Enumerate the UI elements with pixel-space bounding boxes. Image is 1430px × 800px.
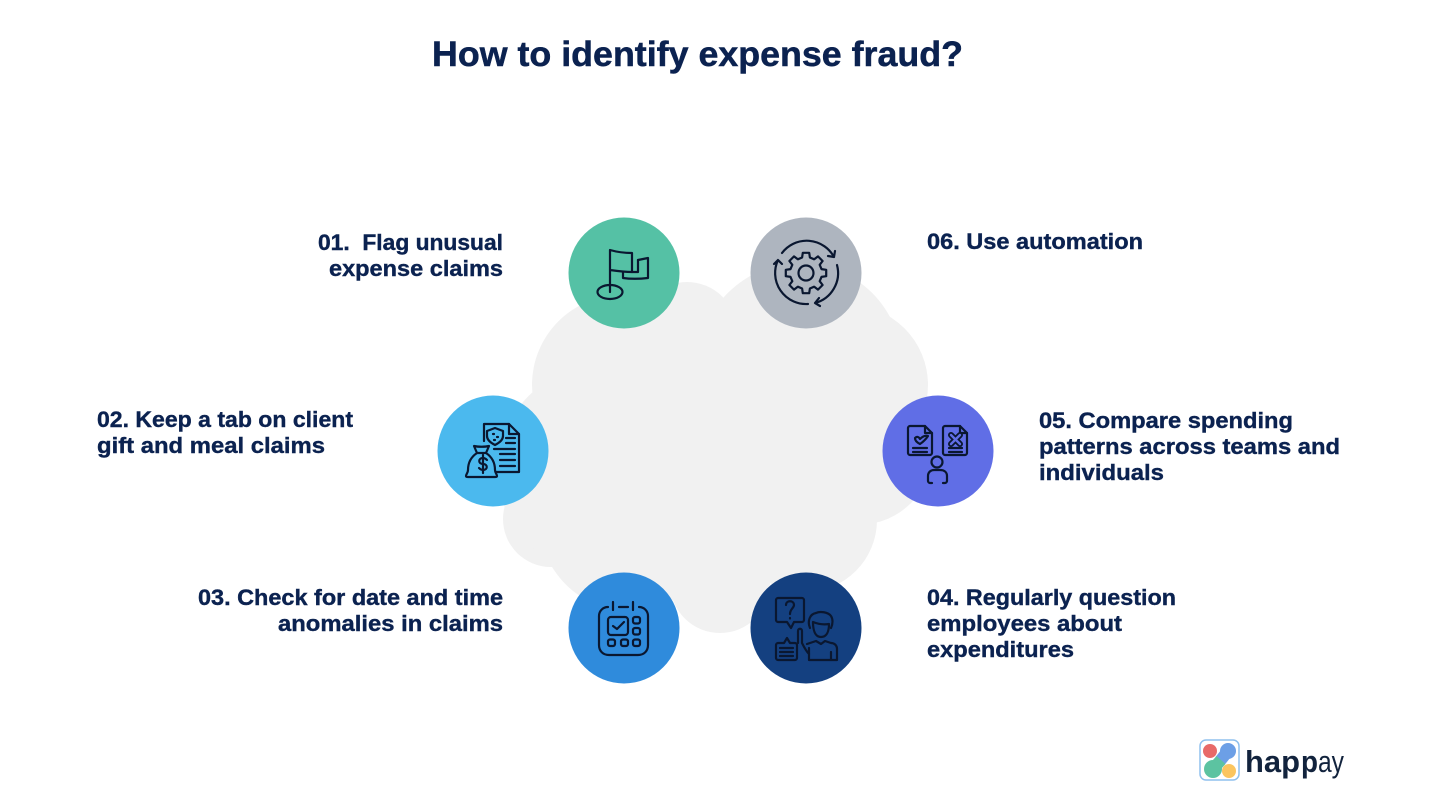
icon: money bag and document	[438, 396, 548, 506]
step 01 label: 01. Flag unusual	[318, 230, 503, 255]
step 06 label: 06. Use automation	[927, 229, 1143, 254]
icon: two documents and person	[882, 396, 994, 506]
title: How to identify expense fraud?	[432, 35, 963, 74]
step 01: flag unusual expense claims	[318, 218, 680, 328]
step 02: client gift and meal claims	[97, 396, 548, 506]
step 05 label: individuals	[1039, 460, 1164, 485]
logo wordmark: p	[1301, 744, 1318, 779]
step 03 label: 03. Check for date and time	[198, 585, 503, 610]
step 04 label: expenditures	[927, 637, 1074, 662]
logo mark	[1200, 740, 1239, 780]
step 04: question employees	[750, 572, 1176, 684]
step 06: use automation	[750, 218, 1143, 328]
step 04 label: employees about	[927, 611, 1123, 636]
step 05 label: 05. Compare spending	[1039, 408, 1293, 433]
step 01 label: expense claims	[329, 256, 503, 281]
step 05: compare spending patterns	[882, 396, 1340, 506]
step 05 label: patterns across teams and	[1039, 434, 1340, 459]
logo wordmark: ay	[1318, 744, 1344, 779]
icon: gear with cycle arrows	[750, 218, 862, 328]
logo wordmark: hap	[1245, 744, 1300, 779]
step 04 label: 04. Regularly question	[927, 585, 1176, 610]
step 03: date and time anomalies	[198, 572, 680, 684]
happay logo	[1200, 740, 1344, 780]
step 03 label: anomalies in claims	[278, 611, 503, 636]
icon: person with question bubble	[750, 572, 862, 684]
icon: flag	[568, 218, 680, 328]
central cloud shape	[498, 263, 933, 633]
icon: calendar	[568, 572, 680, 684]
step 02 label: gift and meal claims	[97, 433, 325, 458]
step 02 label: 02. Keep a tab on client	[97, 407, 354, 432]
